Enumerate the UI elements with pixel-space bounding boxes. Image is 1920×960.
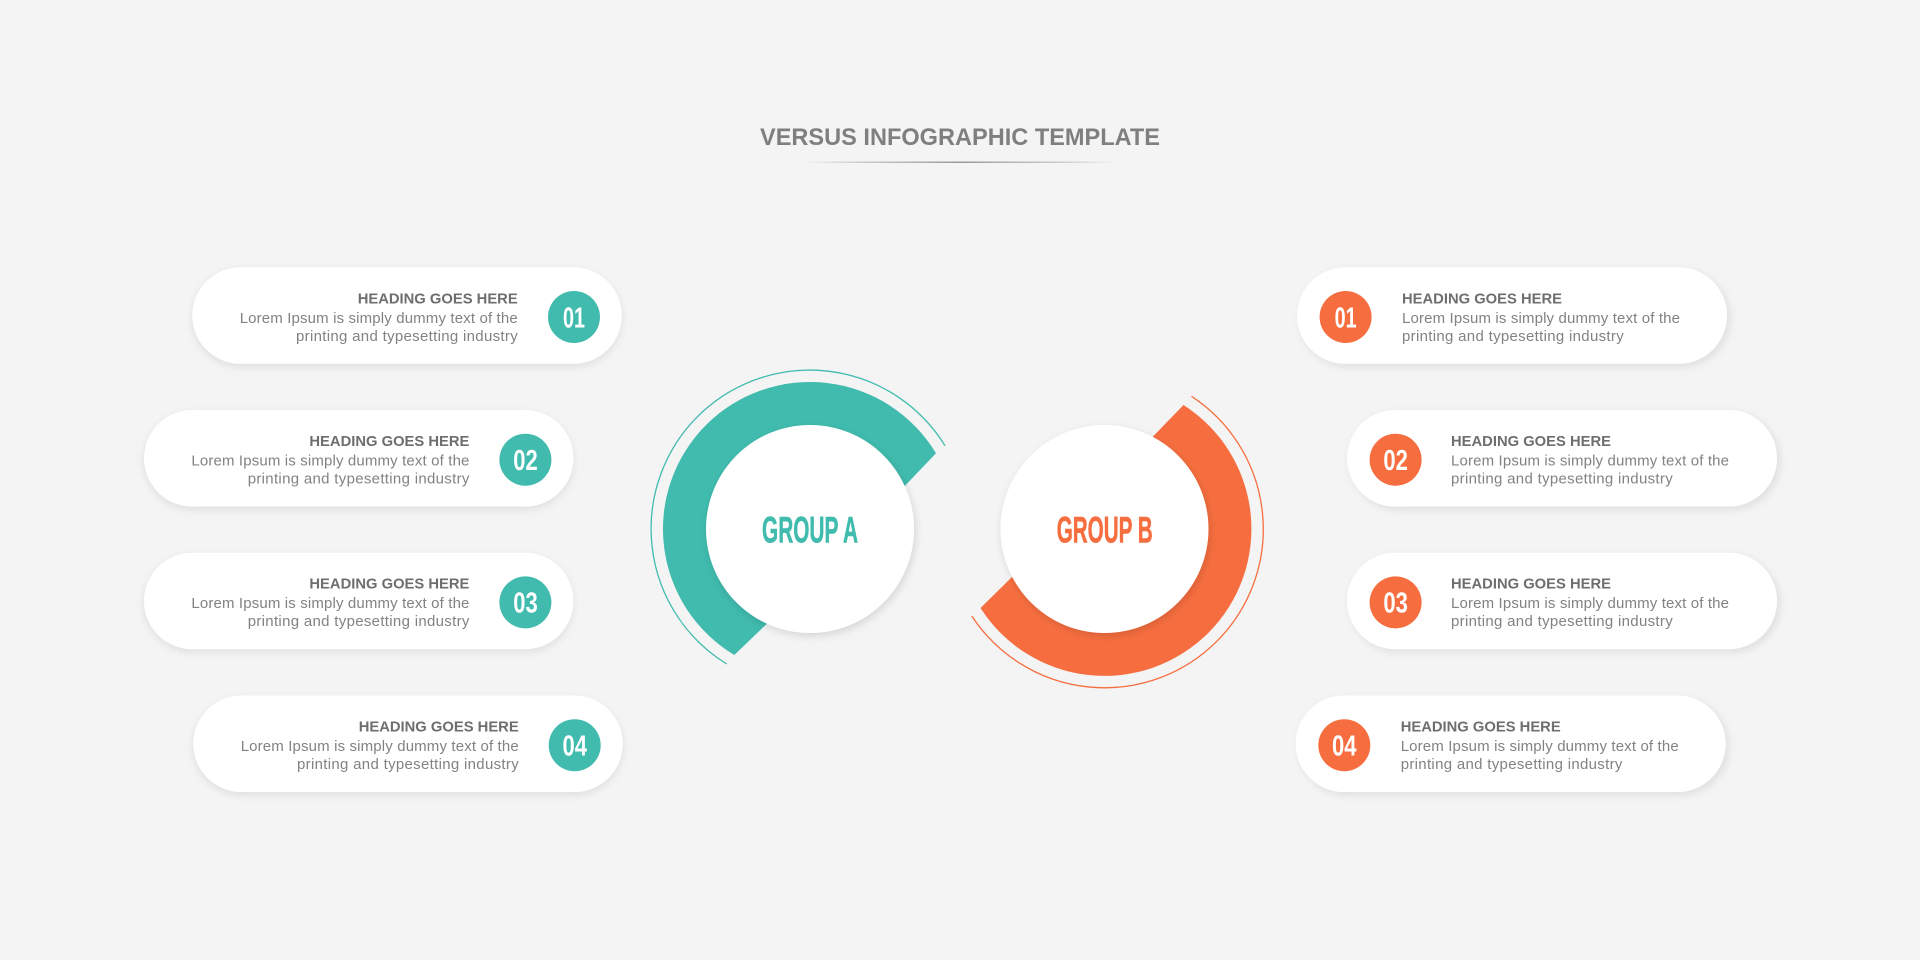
number badge 02: 02 (513, 445, 538, 477)
panel: right item 02 (1347, 410, 1777, 506)
text block (240, 290, 518, 345)
text block: printing and typesetting industry (296, 328, 518, 345)
text block: printing and typesetting industry (248, 470, 470, 488)
panel: group A circle (651, 370, 945, 664)
panel: right item 01 (1297, 267, 1727, 364)
title underline (802, 162, 1118, 163)
text block (1402, 290, 1680, 345)
number badge 01 (1320, 291, 1372, 343)
panel: left item 04 (193, 696, 623, 792)
text block: Lorem Ipsum is simply dummy text of the (191, 595, 469, 612)
label: group B: GROUP B (1057, 510, 1153, 551)
number badge 02: 02 (1383, 445, 1408, 477)
number badge 04: 04 (563, 730, 587, 762)
panel: left item 03 (144, 553, 573, 649)
teal thick arc (663, 382, 936, 655)
text block: Lorem Ipsum is simply dummy text of the (1451, 452, 1729, 470)
text block (191, 576, 470, 630)
number badge 01 (548, 291, 600, 343)
label: group A: GROUP A (762, 510, 858, 551)
text block: printing and typesetting industry (1402, 328, 1624, 345)
text block: printing and typesetting industry (297, 756, 519, 773)
number badge 01: 01 (563, 302, 585, 334)
number badge 02 (499, 434, 551, 486)
text block: HEADING GOES HERE (1451, 433, 1611, 450)
number badge 04: 04 (1332, 730, 1357, 762)
number badge 03: 03 (513, 588, 538, 620)
text block: Lorem Ipsum is simply dummy text of the (1451, 595, 1729, 612)
text block: printing and typesetting industry (1401, 756, 1623, 773)
panel: right item 04 (1296, 696, 1726, 792)
text block: printing and typesetting industry (1451, 470, 1673, 488)
panel: right item 03 (1347, 553, 1777, 649)
orange thin outer arc (972, 396, 1263, 688)
text block (241, 718, 519, 773)
number badge 04 (1318, 719, 1370, 771)
text block: HEADING GOES HERE (358, 290, 518, 307)
white centre circle A (706, 425, 914, 633)
text block: HEADING GOES HERE (309, 433, 469, 450)
number badge 01: 01 (1335, 302, 1357, 334)
text block: printing and typesetting industry (248, 613, 470, 630)
text block: HEADING GOES HERE (1401, 718, 1561, 736)
number badge 03 (1370, 576, 1422, 628)
text block: Lorem Ipsum is simply dummy text of the (241, 738, 519, 755)
text block: HEADING GOES HERE (309, 576, 469, 593)
panel: left item 02 (144, 410, 573, 506)
text block: Lorem Ipsum is simply dummy text of the (1401, 738, 1679, 755)
number badge 02 (1370, 434, 1422, 486)
text block: Lorem Ipsum is simply dummy text of the (191, 452, 469, 470)
number badge 04 (549, 719, 601, 771)
white centre circle B (1000, 425, 1208, 633)
panel: group B circle (972, 396, 1263, 688)
text block (191, 433, 470, 488)
text block (1401, 718, 1679, 773)
text block: HEADING GOES HERE (359, 718, 519, 736)
text block: Lorem Ipsum is simply dummy text of the (1402, 310, 1680, 327)
teal thin outer arc (651, 370, 945, 664)
panel: left item 01 (192, 267, 622, 364)
orange thick arc (980, 405, 1251, 676)
text block: HEADING GOES HERE (1451, 576, 1611, 593)
title: VERSUS INFOGRAPHIC TEMPLATE (760, 125, 1160, 151)
number badge 03 (499, 576, 551, 628)
number badge 03: 03 (1383, 588, 1408, 620)
text block: printing and typesetting industry (1451, 613, 1673, 630)
text block (1451, 576, 1729, 630)
text block: Lorem Ipsum is simply dummy text of the (240, 310, 518, 327)
text block (1451, 433, 1729, 488)
text block: HEADING GOES HERE (1402, 290, 1562, 307)
